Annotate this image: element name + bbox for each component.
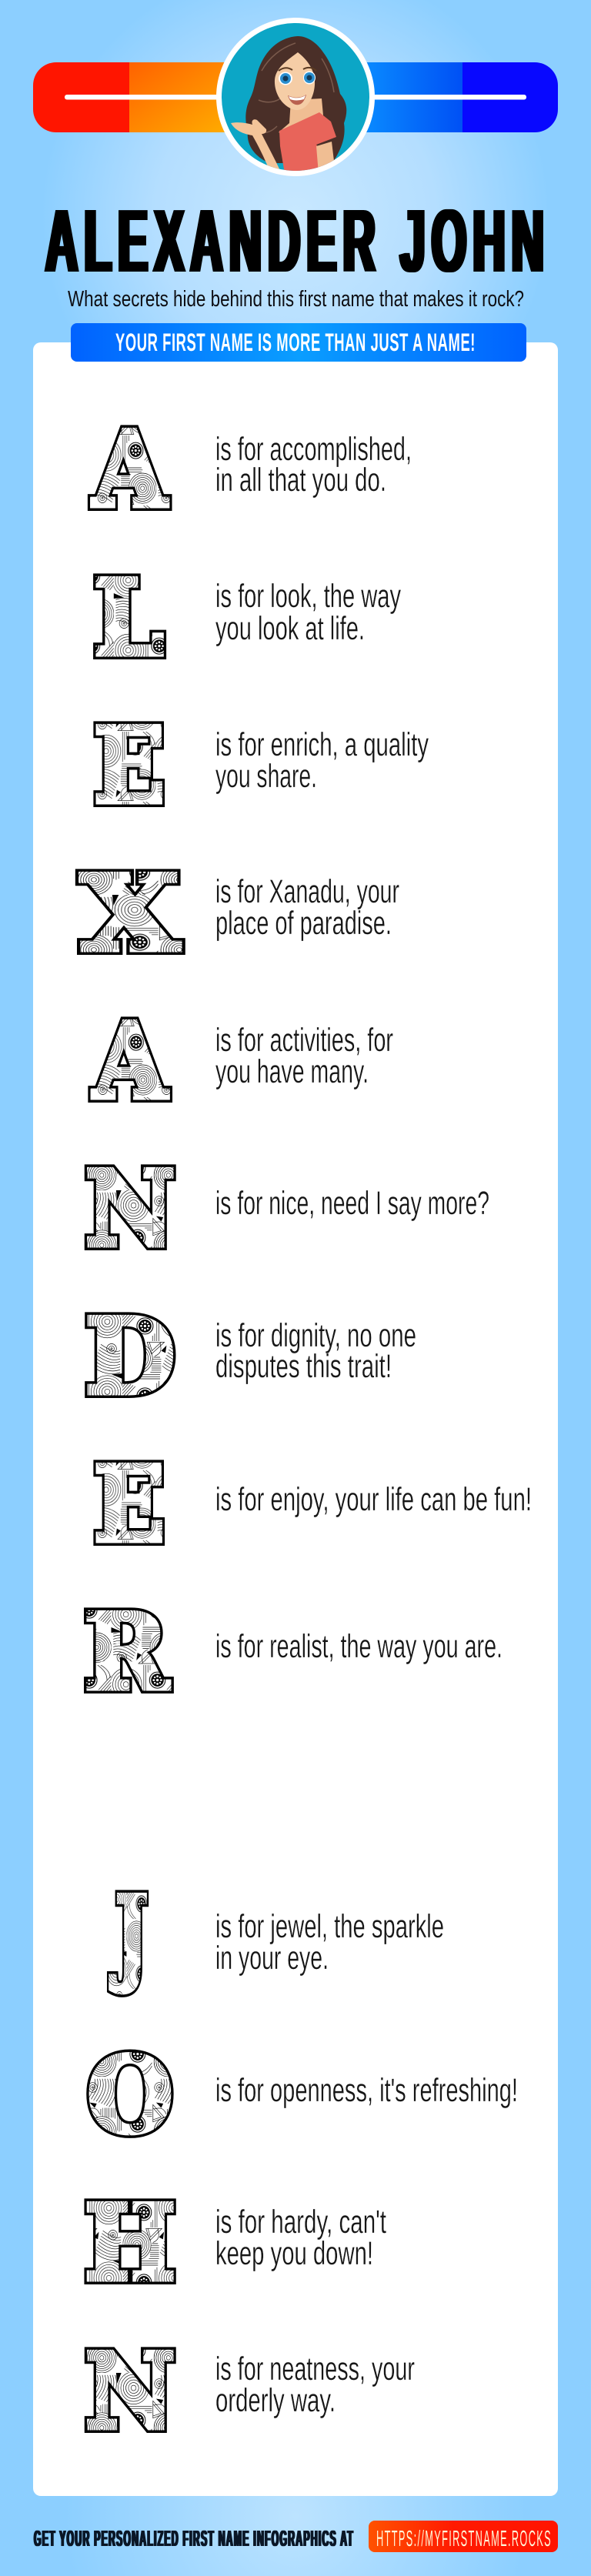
icon: letter J: J bbox=[110, 1874, 148, 1995]
icon: woman portrait bbox=[216, 18, 375, 176]
text: activities: is for activities, for bbox=[215, 1022, 393, 1059]
text: hardy: is for hardy, can't bbox=[215, 2204, 386, 2241]
row: A accomplished bbox=[92, 410, 412, 530]
text: neatness bbox=[215, 2351, 415, 2419]
icon: letter E: E bbox=[94, 1444, 165, 1566]
text: activities: you have many. bbox=[215, 1053, 369, 1090]
footer link button bbox=[369, 2521, 558, 2552]
row: J jewel bbox=[110, 1874, 444, 1995]
text: hardy bbox=[215, 2204, 386, 2272]
text: Xanadu bbox=[215, 873, 399, 942]
row: D dignity bbox=[85, 1296, 416, 1417]
icon: letter A: A bbox=[92, 410, 167, 530]
row: E enrich bbox=[94, 706, 429, 827]
text: jewel bbox=[215, 1908, 444, 1977]
icon: letter L: L bbox=[94, 558, 163, 679]
icon: letter N: N bbox=[85, 2331, 175, 2452]
row: E enjoy bbox=[94, 1444, 532, 1566]
text: neatness: orderly way. bbox=[215, 2382, 336, 2419]
icon: letter A: A bbox=[92, 410, 167, 530]
icon: letter E: E bbox=[94, 1444, 165, 1566]
icon: letter E: E bbox=[94, 706, 165, 827]
text: look bbox=[215, 578, 401, 647]
icon: letter R: R bbox=[85, 1592, 169, 1713]
icon: letter H: H bbox=[85, 2183, 175, 2304]
text: Xanadu: place of paradise. bbox=[215, 905, 392, 942]
header bar bbox=[33, 62, 558, 132]
text: accomplished bbox=[215, 431, 412, 499]
icon: letter H: H bbox=[85, 2183, 175, 2304]
row: A activities bbox=[93, 1002, 393, 1122]
row: L look bbox=[94, 558, 401, 679]
icon: letter X: X bbox=[82, 853, 179, 974]
text: jewel: in your eye. bbox=[215, 1940, 329, 1977]
text: Xanadu: is for Xanadu, your bbox=[215, 873, 399, 910]
text: enrich bbox=[215, 726, 429, 795]
panel: white content card bbox=[33, 342, 558, 2496]
text: enrich: is for enrich, a quality bbox=[215, 726, 429, 763]
icon: letter N: N bbox=[85, 2331, 175, 2452]
text: activities bbox=[215, 1022, 393, 1090]
icon: letter O: O bbox=[88, 2034, 172, 2156]
text: enrich: you share. bbox=[215, 758, 317, 795]
icon: letter A: A bbox=[93, 1002, 168, 1122]
text: jewel: is for jewel, the sparkle bbox=[215, 1908, 444, 1945]
text: accomplished: in all that you do. bbox=[215, 462, 386, 499]
icon: letter J: J bbox=[110, 1874, 148, 1995]
icon: letter L: L bbox=[94, 558, 163, 679]
icon: letter N: N bbox=[85, 1148, 175, 1270]
text: dignity: is for dignity, no one bbox=[215, 1317, 416, 1354]
banner bbox=[71, 323, 526, 362]
text: look: you look at life. bbox=[215, 610, 365, 647]
row: N nice bbox=[85, 1148, 489, 1270]
icon: letter N: N bbox=[85, 1148, 175, 1270]
icon: letter E: E bbox=[94, 706, 165, 827]
icon: letter D: D bbox=[85, 1296, 175, 1417]
text: dignity: disputes this trait! bbox=[215, 1348, 392, 1385]
row: H hardy bbox=[85, 2183, 386, 2304]
row: X Xanadu bbox=[82, 853, 399, 974]
row: O openness bbox=[88, 2034, 518, 2156]
text: accomplished: is for accomplished, bbox=[215, 431, 412, 468]
text: look: is for look, the way bbox=[215, 578, 401, 615]
text: dignity bbox=[215, 1317, 416, 1385]
icon: letter D: D bbox=[85, 1296, 175, 1417]
text: neatness: is for neatness, your bbox=[215, 2351, 415, 2387]
icon: letter A: A bbox=[93, 1002, 168, 1122]
icon: letter R: R bbox=[85, 1592, 169, 1713]
row: R realist bbox=[85, 1592, 503, 1713]
icon: letter X: X bbox=[82, 853, 179, 974]
text: hardy: keep you down! bbox=[215, 2235, 373, 2272]
icon: letter O: O bbox=[88, 2034, 172, 2156]
row: N neatness bbox=[85, 2331, 415, 2452]
